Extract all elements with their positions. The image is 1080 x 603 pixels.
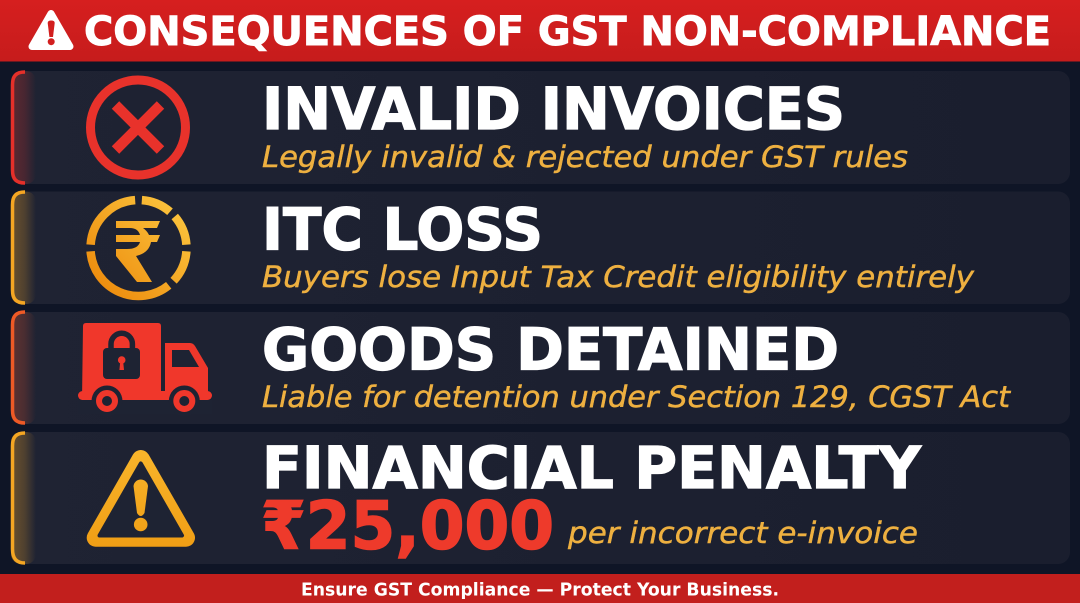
panel: financial penalty — [11, 432, 1070, 564]
title: CONSEQUENCES OF GST NON-COMPLIANCE — [84, 9, 1051, 55]
panel: ITC loss — [11, 192, 1070, 304]
footer text: Ensure GST Compliance — Protect Your Business. — [301, 580, 779, 600]
description: Buyers lose Input Tax Credit eligibility entirely — [262, 260, 975, 294]
accent bracket — [12, 72, 25, 183]
accent bracket — [12, 312, 25, 423]
footer banner — [0, 574, 1080, 603]
accent bracket — [12, 192, 25, 303]
icon: red circle with cross — [90, 80, 186, 175]
header banner — [0, 0, 1080, 62]
accent bracket — [12, 433, 25, 563]
heading: ITC LOSS — [262, 196, 543, 264]
icon: rupee coin — [91, 200, 186, 296]
panel: invalid invoices — [11, 71, 1070, 184]
heading: INVALID INVOICES — [262, 75, 845, 143]
heading: GOODS DETAINED — [262, 316, 839, 384]
icon: warning triangle — [96, 459, 186, 538]
lock — [103, 333, 140, 379]
icon: locked truck — [78, 323, 212, 416]
description: Liable for detention under Section 129, CGST Act — [262, 380, 1012, 414]
heading: FINANCIAL PENALTY — [262, 434, 922, 502]
description: Legally invalid & rejected under GST rules — [262, 140, 908, 174]
panel: goods detained — [11, 312, 1070, 424]
description: per incorrect e-invoice — [567, 516, 918, 550]
icon: header warning triangle — [32, 14, 70, 46]
penalty amount: ₹25,000 — [261, 488, 554, 564]
